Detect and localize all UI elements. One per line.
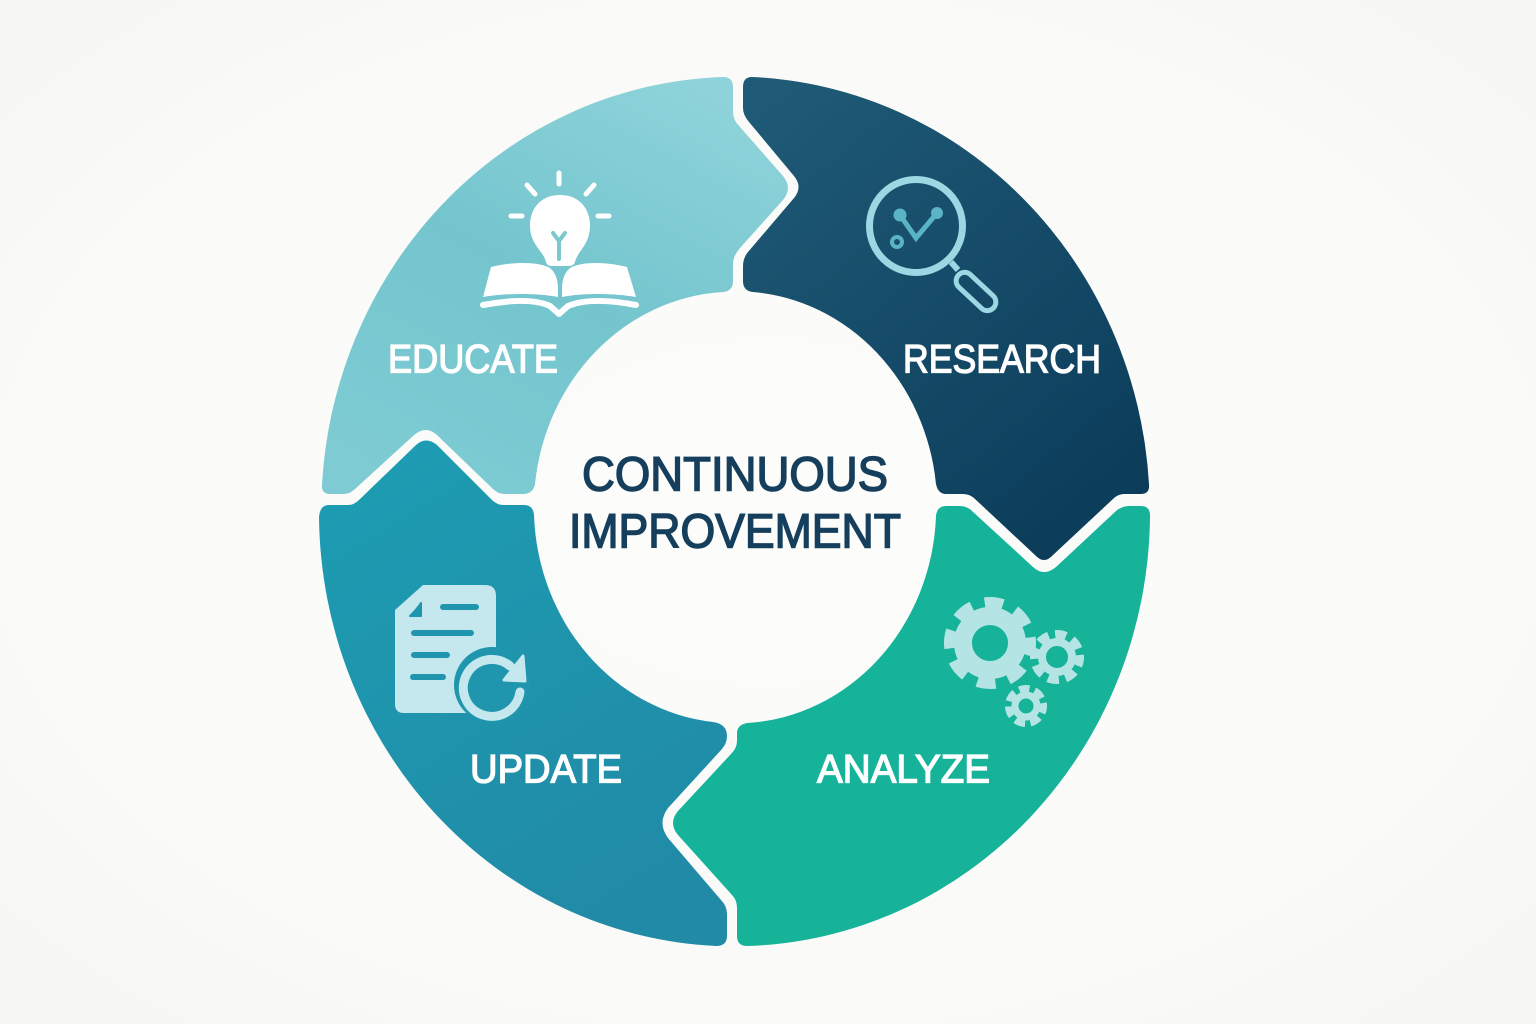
label: update: UPDATE bbox=[470, 748, 622, 792]
icon: light bulb over open book bbox=[483, 173, 636, 314]
label: analyze: ANALYZE bbox=[817, 748, 990, 792]
label: educate: EDUCATE bbox=[388, 338, 558, 382]
title: continuous improvement bbox=[569, 448, 901, 558]
panel: analyze segment bbox=[673, 506, 1150, 946]
title: continuous improvement: CONTINUOUS bbox=[582, 448, 888, 502]
icon: magnifying glass with chart bbox=[870, 180, 999, 314]
panel: research segment bbox=[743, 77, 1149, 560]
label: research: RESEARCH bbox=[903, 338, 1101, 382]
panel: update segment bbox=[319, 440, 727, 946]
icon: document with refresh arrow bbox=[395, 585, 530, 723]
title: continuous improvement: IMPROVEMENT bbox=[569, 506, 901, 558]
panel: educate segment bbox=[322, 77, 788, 494]
icon: three gears bbox=[945, 598, 1081, 726]
